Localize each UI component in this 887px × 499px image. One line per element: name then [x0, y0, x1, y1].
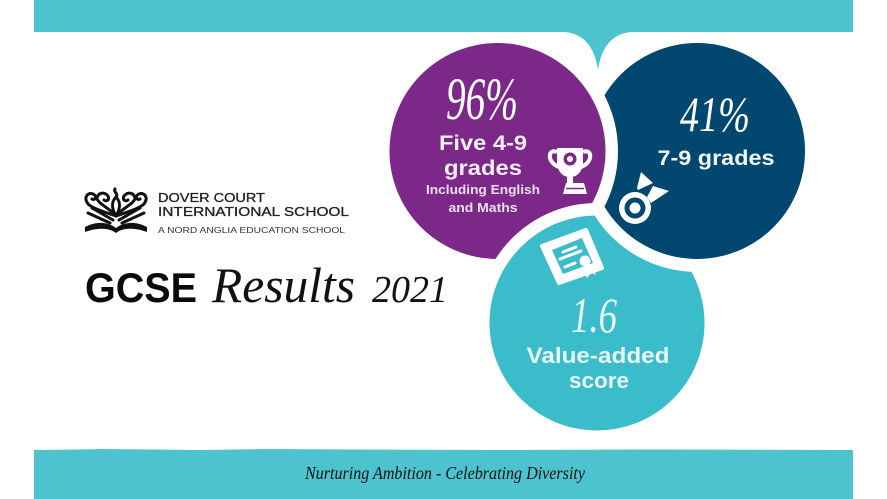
stat: 96%: 96%	[446, 66, 518, 132]
label: 7-9 grades: 7-9 grades	[658, 146, 775, 170]
stat: 41%: 41%	[680, 86, 750, 142]
icon: medal	[619, 172, 669, 224]
icon: school crest	[85, 189, 147, 233]
title: GCSE Results 2021: GCSE	[85, 264, 197, 311]
panel: purple circle 96%	[390, 43, 606, 259]
label: Value-added score: Value-added	[526, 343, 670, 368]
title: GCSE Results 2021: 2021	[372, 269, 448, 311]
tagline: A NORD ANGLIA EDUCATION SCHOOL	[158, 225, 345, 235]
logo: Dover Court International School	[85, 189, 349, 235]
logo: Dover Court International School: INTERNATIONAL SCHOOL	[158, 204, 349, 219]
stat: 1.6: 1.6	[571, 287, 617, 343]
school name: DOVER COURT	[158, 190, 265, 205]
bottom teal band with tagline	[34, 449, 853, 499]
label: Five 4-9 grades: Five 4-9	[439, 132, 527, 155]
tagline text: Nurturing Ambition - Celebrating Diversity	[304, 463, 585, 483]
icon: trophy	[550, 148, 590, 194]
panel: purple circle 96%: and Maths	[448, 201, 518, 215]
panel: purple circle 96%: grades	[444, 157, 522, 180]
panel: navy circle 41%	[589, 43, 805, 259]
panel: teal circle 1.6	[490, 216, 704, 430]
title: GCSE Results 2021: Results	[211, 257, 355, 313]
icon: certificate	[542, 230, 602, 283]
title: GCSE Results 2021	[85, 257, 448, 313]
top teal band with notch	[34, 0, 853, 70]
panel: teal circle 1.6: score	[569, 368, 629, 393]
label: Including English and Maths: Including English	[426, 183, 540, 197]
